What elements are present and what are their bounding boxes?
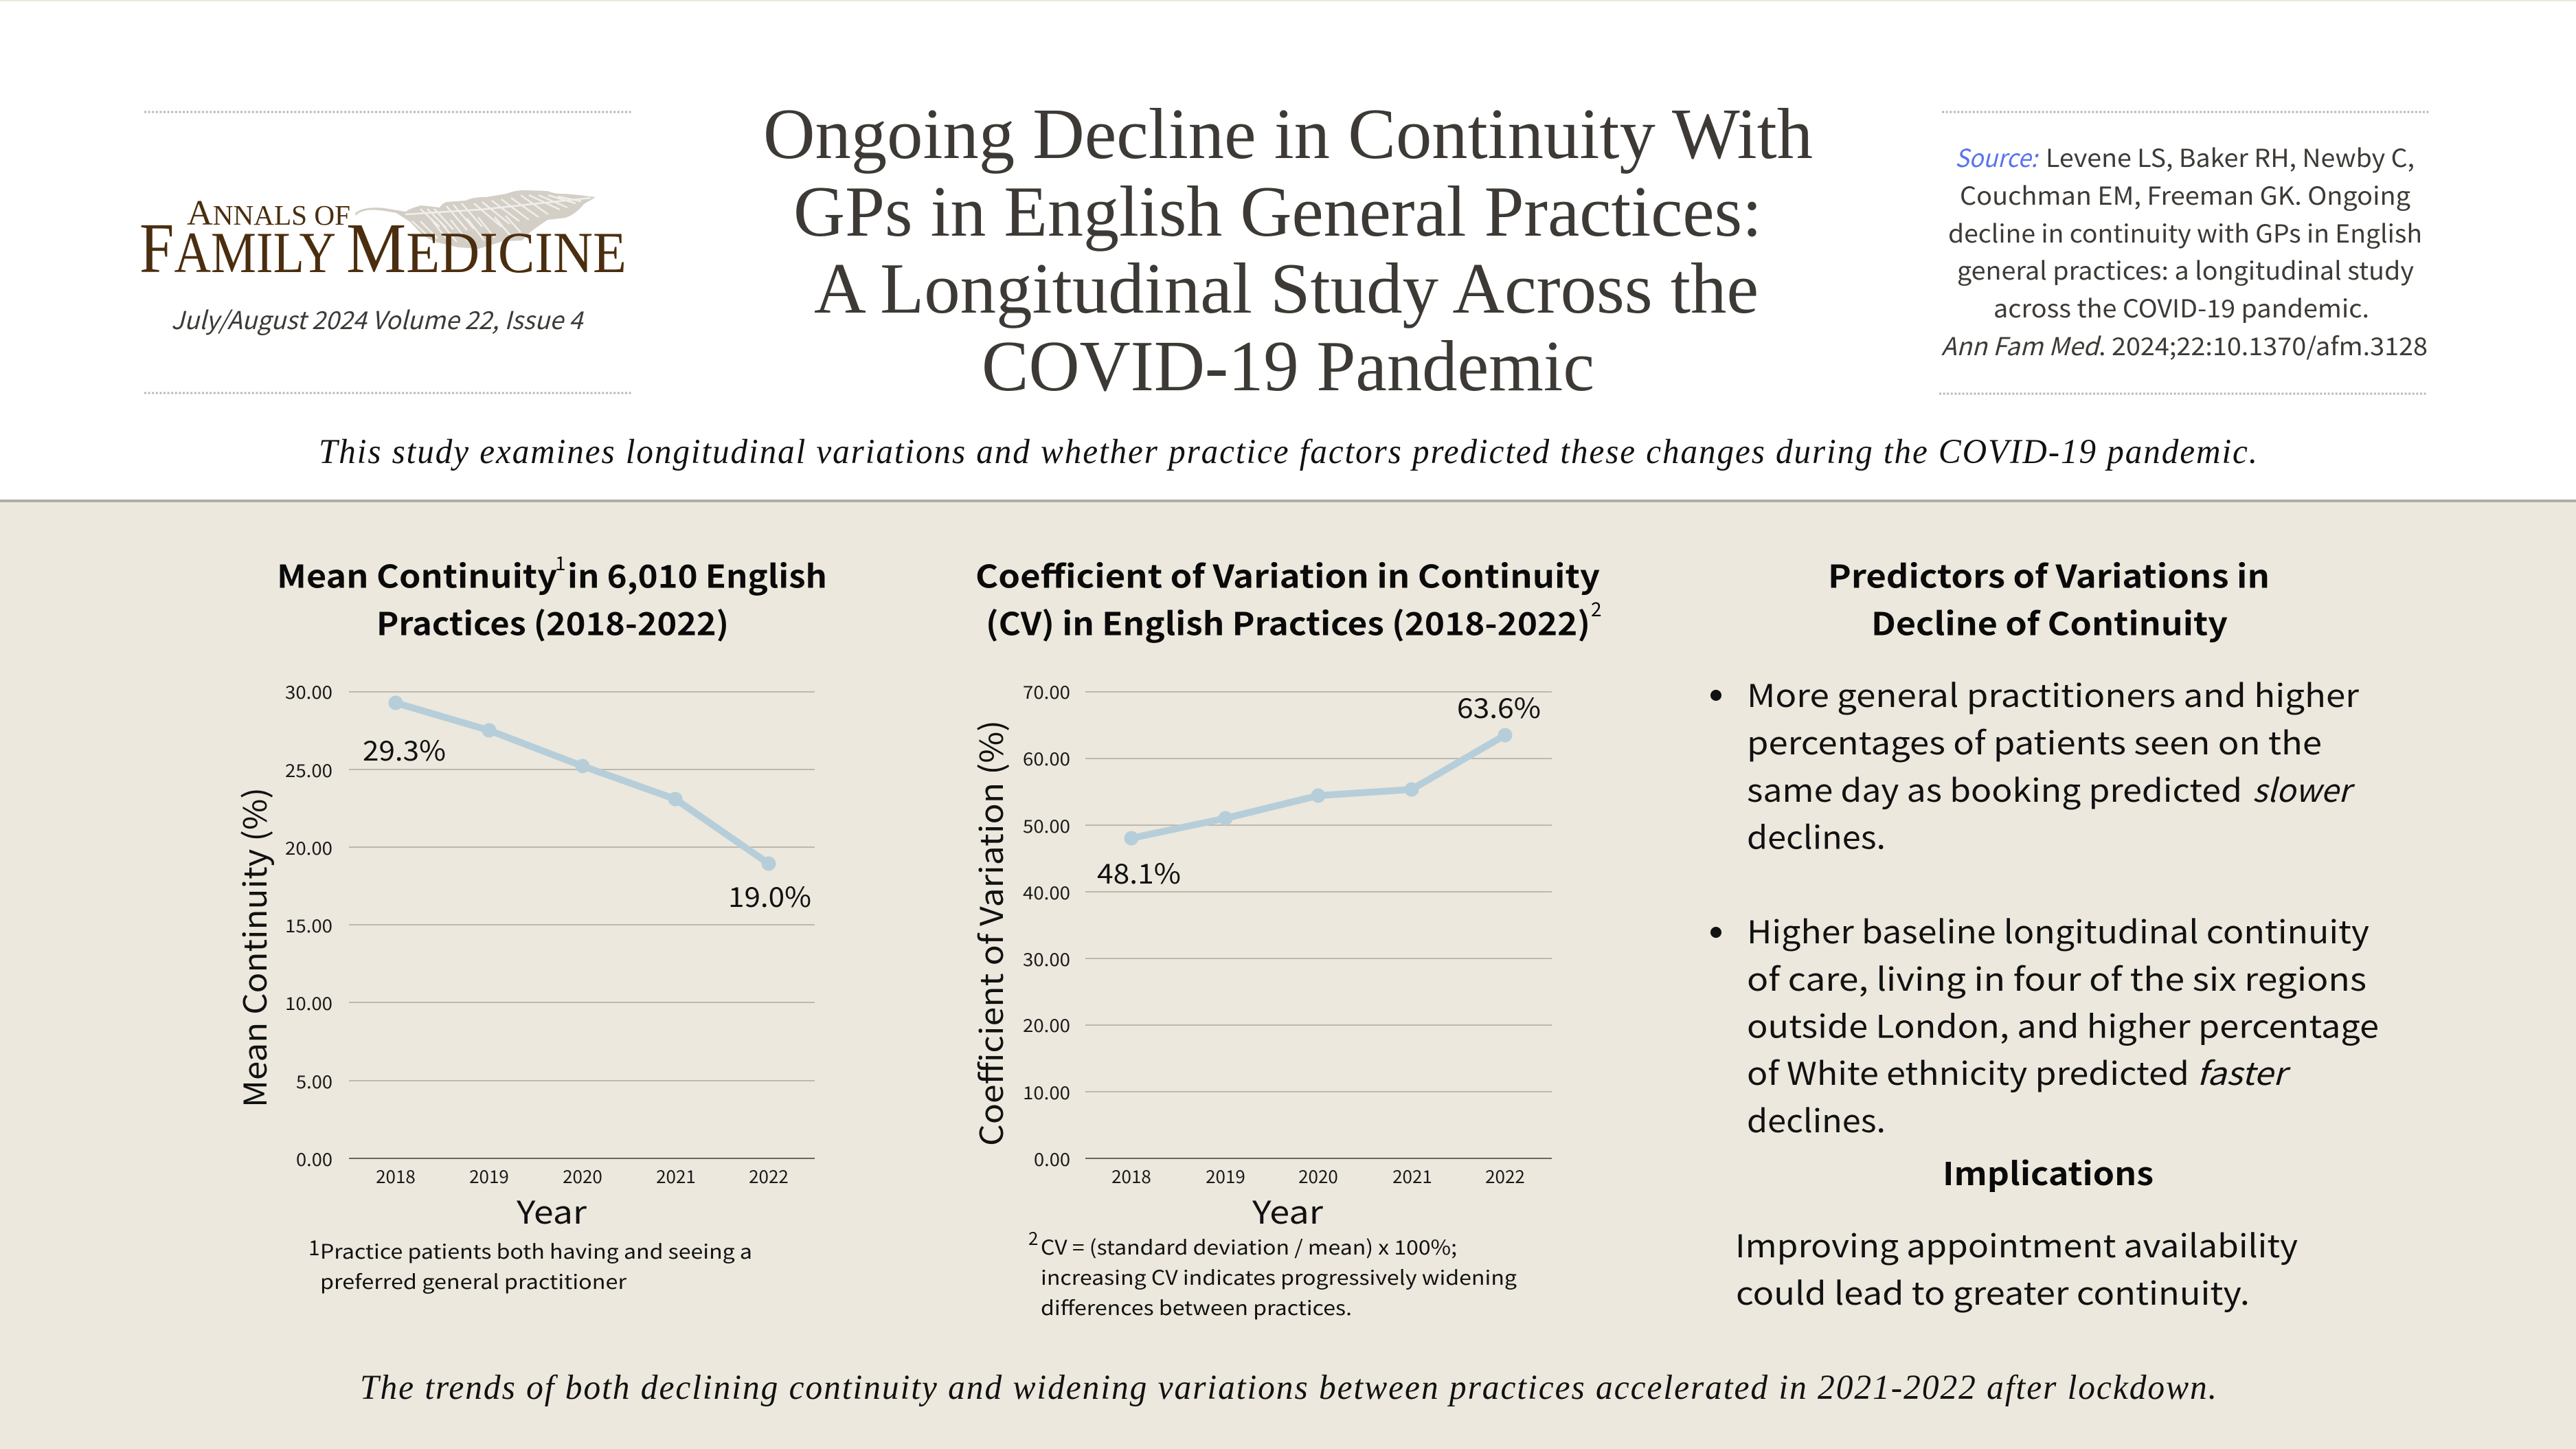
- y axis title: Coefficient of Variation (%): [967, 720, 1013, 1146]
- line chart: coefficient of variation: 40.00: [1023, 879, 1070, 905]
- chart heading: Coefficient of Variation in Continuity: [975, 552, 1600, 598]
- panel: source citation: Source:: [1955, 139, 2039, 175]
- bullet: faster declines: faster: [2197, 1049, 2292, 1094]
- line chart: mean continuity: 2018: [376, 1163, 416, 1189]
- line chart: coefficient of variation: 2021: [1392, 1163, 1432, 1189]
- chart heading: in 6,010 English: [567, 552, 827, 598]
- panel: mean continuity chart: [231, 549, 827, 1295]
- footnote 2: CV = (standard deviation / mean) x 100%;: [1041, 1232, 1457, 1261]
- bullet: slower declines: declines.: [1747, 813, 1886, 859]
- panel: source citation: . 2024;22:10.1370/afm.3128: [2099, 327, 2428, 363]
- line chart: coefficient of variation: [1023, 679, 1552, 1189]
- line chart: mean continuity: 5.00: [296, 1068, 332, 1094]
- line chart: mean continuity: 10.00: [285, 990, 332, 1015]
- predictors heading: Predictors of Variations in: [1828, 552, 2270, 598]
- line chart: mean continuity: [285, 679, 815, 1189]
- bullet: slower declines: [1710, 671, 2359, 859]
- title: [763, 93, 1813, 406]
- title: COVID-19 Pandemic: [982, 326, 1594, 406]
- implications text: Improving appointment availability: [1735, 1222, 2298, 1267]
- footnote 1: preferred general practitioner: [320, 1266, 627, 1295]
- panel: source citation: general practices: a longitudinal study: [1957, 251, 2414, 287]
- line chart: coefficient of variation: 2022: [1485, 1163, 1525, 1189]
- panel: source citation: Ann Fam Med: [1941, 327, 2102, 363]
- subtitle: This study examines longitudinal variations and whether practice factors predicted these changes during the COVID-19 pandemic.: [319, 433, 2259, 471]
- line chart: mean continuity: 19.0%: [728, 875, 811, 915]
- chart heading: Practices (2018-2022): [376, 599, 729, 644]
- bullet: slower declines: percentages of patients seen on the: [1747, 719, 2322, 764]
- panel: coefficient of variation chart: [967, 552, 1602, 1321]
- bullet: faster declines: of care, living in four of the six regions: [1747, 955, 2366, 1000]
- bullet: faster declines: [1710, 908, 2379, 1142]
- footnote 2: increasing CV indicates progressively widening: [1041, 1262, 1517, 1291]
- panel: predictors and implications: [1710, 552, 2379, 1314]
- panel: source citation: Couchman EM, Freeman GK. Ongoing: [1960, 177, 2410, 212]
- icon: fern leaf: [355, 190, 596, 249]
- line chart: coefficient of variation: 63.6%: [1457, 686, 1541, 726]
- bullet: slower declines: same day as booking predicted: [1747, 766, 2242, 811]
- x axis title: Year: [516, 1188, 587, 1233]
- line chart: coefficient of variation: 60.00: [1023, 745, 1070, 771]
- x axis title: Year: [1252, 1188, 1323, 1233]
- line chart: coefficient of variation: 10.00: [1023, 1079, 1070, 1105]
- chart heading: [975, 552, 1602, 644]
- implications text: [1735, 1222, 2298, 1314]
- predictors heading: Decline of Continuity: [1871, 599, 2228, 644]
- chart heading: [277, 549, 827, 644]
- footnote 1: Practice patients both having and seeing a: [320, 1236, 752, 1265]
- panel: source citation: across the COVID-19 pandemic.: [1993, 289, 2369, 325]
- bullet: slower declines: slower: [2252, 766, 2355, 811]
- footnote 1: [308, 1231, 752, 1295]
- title: Ongoing Decline in Continuity With: [763, 93, 1813, 174]
- title: GPs in English General Practices:: [793, 171, 1762, 251]
- chart heading: 2: [1591, 595, 1602, 622]
- line chart: coefficient of variation: 0.00: [1034, 1146, 1070, 1171]
- line chart: coefficient of variation: 70.00: [1023, 679, 1070, 704]
- conclusion caption: The trends of both declining continuity and widening variations between practices accelerated in 2021-2022 after lockdown.: [360, 1369, 2218, 1407]
- line chart: mean continuity: 15.00: [285, 912, 332, 938]
- bullet: faster declines: outside London, and higher percentage: [1747, 1002, 2379, 1047]
- line chart: coefficient of variation: 2018: [1111, 1163, 1151, 1189]
- panel: source citation: Levene LS, Baker RH, Newby C,: [2046, 139, 2415, 175]
- footnote 2: [1028, 1225, 1517, 1321]
- line chart: coefficient of variation: 2019: [1206, 1163, 1245, 1189]
- chart heading: Mean Continuity: [277, 552, 557, 598]
- panel: source citation: [1939, 112, 2430, 394]
- line chart: mean continuity: 2021: [656, 1163, 696, 1189]
- line chart: mean continuity: 20.00: [285, 835, 332, 860]
- issue date: July/August 2024 Volume 22, Issue 4: [171, 301, 584, 337]
- chart heading: 1: [555, 549, 566, 576]
- implications text: could lead to greater continuity.: [1736, 1269, 2250, 1314]
- panel: journal masthead: [139, 112, 633, 393]
- logo text: Medicine: MEDICINE: [346, 209, 626, 288]
- line chart: mean continuity: 29.3%: [363, 729, 446, 769]
- line chart: mean continuity: 0.00: [296, 1146, 332, 1171]
- line chart: coefficient of variation: 20.00: [1023, 1012, 1070, 1037]
- line chart: mean continuity: 25.00: [285, 757, 332, 783]
- line chart: coefficient of variation: 2020: [1298, 1163, 1338, 1189]
- logo text: Family: FAMILY: [139, 209, 336, 288]
- line chart: coefficient of variation: 50.00: [1023, 813, 1070, 838]
- line chart: mean continuity: 2020: [563, 1163, 602, 1189]
- predictors heading: [1828, 552, 2270, 644]
- line chart: mean continuity: 2022: [749, 1163, 789, 1189]
- y axis title: Mean Continuity (%): [231, 787, 276, 1108]
- bullet: faster declines: Higher baseline longitudinal continuity: [1747, 908, 2369, 953]
- footnote 2: differences between practices.: [1041, 1292, 1352, 1321]
- panel: source citation: decline in continuity with GPs in English: [1948, 214, 2422, 250]
- footnote 1: 1: [308, 1231, 320, 1261]
- bullet: faster declines: of White ethnicity predicted: [1747, 1049, 2189, 1094]
- bullet: slower declines: More general practitioners and higher: [1747, 671, 2359, 717]
- implications heading: Implications: [1943, 1149, 2154, 1195]
- footnote 2: 2: [1028, 1225, 1038, 1250]
- title: A Longitudinal Study Across the: [814, 248, 1759, 328]
- line chart: coefficient of variation: 48.1%: [1097, 852, 1181, 892]
- logo text: Annals of: ANNALS OF: [187, 194, 350, 233]
- line chart: coefficient of variation: 30.00: [1023, 946, 1070, 971]
- line chart: mean continuity: 2019: [469, 1163, 509, 1189]
- chart heading: (CV) in English Practices (2018-2022): [986, 599, 1590, 644]
- bullet: faster declines: declines.: [1747, 1097, 1886, 1142]
- line chart: mean continuity: 30.00: [285, 679, 332, 704]
